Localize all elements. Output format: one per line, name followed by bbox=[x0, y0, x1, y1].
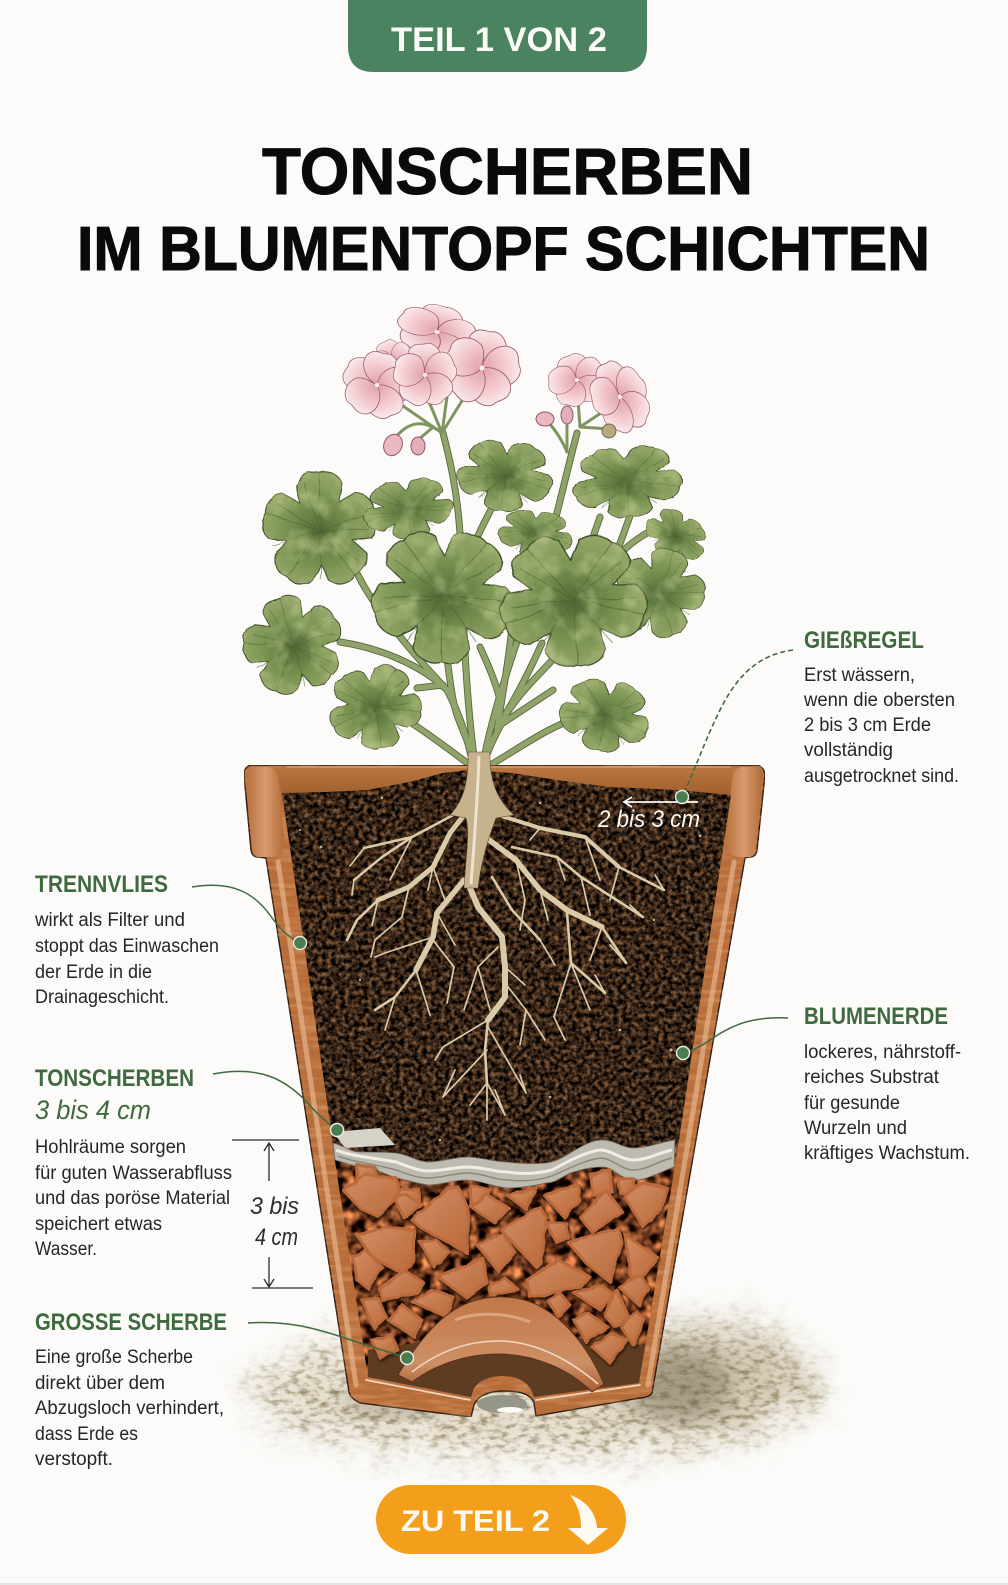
callout: Tonscherben: 3 bis 4 cm bbox=[35, 1095, 151, 1125]
callout: Trennvlies: TRENNVLIES bbox=[35, 871, 168, 898]
clay shards layer bbox=[343, 1165, 667, 1363]
pot wall highlights bbox=[278, 767, 734, 1400]
callout: Grosse Scherbe: Eine große Scherbe bbox=[35, 1347, 193, 1368]
roots bbox=[347, 810, 664, 1120]
button: zu Teil 2 bbox=[376, 1485, 626, 1554]
flower cluster right bbox=[536, 344, 666, 448]
callout: Gießregel: ausgetrocknet sind. bbox=[804, 766, 959, 787]
separation fleece bbox=[333, 1128, 675, 1188]
flower cluster left bbox=[329, 295, 530, 459]
soil specks bbox=[299, 797, 701, 1141]
callout: Grosse Scherbe: Abzugsloch verhindert, bbox=[35, 1398, 224, 1419]
callout: Gießregel: wenn die obersten bbox=[803, 690, 955, 711]
callout: Gießregel: 2 bis 3 cm Erde bbox=[804, 715, 931, 736]
measurement: 2 bis 3 cm: 2 bis 3 cm bbox=[597, 806, 700, 833]
measurement: 3 bis 4 cm bbox=[232, 1140, 313, 1288]
callout: Blumenerde: Wurzeln und bbox=[804, 1118, 907, 1139]
callout: Trennvlies: stoppt das Einwaschen bbox=[35, 936, 219, 957]
callout: Grosse Scherbe bbox=[35, 1309, 414, 1470]
callout: Tonscherben bbox=[35, 1065, 344, 1260]
title: TONSCHERBEN bbox=[262, 134, 753, 208]
callout: Tonscherben: Wasser. bbox=[35, 1239, 97, 1260]
callout: Blumenerde bbox=[676, 1003, 970, 1164]
callout: Trennvlies: Drainageschicht. bbox=[35, 987, 169, 1008]
illustration: pot cross-section bbox=[244, 752, 765, 1417]
callout: Blumenerde: reiches Substrat bbox=[804, 1067, 940, 1088]
callout: Blumenerde: kräftiges Wachstum. bbox=[804, 1143, 970, 1164]
callout: Tonscherben: speichert etwas bbox=[35, 1214, 162, 1235]
callout: Grosse Scherbe: verstopft. bbox=[35, 1449, 113, 1470]
left rim pillar bbox=[246, 767, 285, 857]
callout: Gießregel bbox=[676, 627, 959, 804]
callout: Grosse Scherbe: GROSSE SCHERBE bbox=[35, 1309, 227, 1336]
callout: Gießregel: vollständig bbox=[804, 740, 893, 761]
callout: Grosse Scherbe: dass Erde es bbox=[35, 1424, 138, 1445]
callout: Gießregel: Erst wässern, bbox=[804, 665, 915, 686]
callout: Tonscherben: Hohlräume sorgen bbox=[35, 1137, 186, 1158]
potting soil bbox=[282, 770, 731, 1163]
callout: Grosse Scherbe: direkt über dem bbox=[35, 1373, 165, 1394]
plant crown and taproot bbox=[450, 752, 514, 888]
callout: Gießregel: GIEßREGEL bbox=[804, 627, 924, 654]
right rim pillar bbox=[725, 767, 763, 857]
drainage hole bbox=[477, 1395, 527, 1413]
callout: Trennvlies: wirkt als Filter und bbox=[34, 910, 185, 931]
badge: Teil 1 von 2 bbox=[348, 0, 647, 72]
drainage cavity with small pebbles bbox=[331, 1135, 680, 1397]
callout: Trennvlies bbox=[34, 871, 306, 1008]
measurement: 3 bis 4 cm: 4 cm bbox=[255, 1224, 298, 1251]
callout: Blumenerde: lockeres, nährstoff- bbox=[804, 1042, 961, 1063]
badge: Teil 1 von 2: TEIL 1 VON 2 bbox=[391, 21, 607, 59]
title bbox=[77, 134, 930, 284]
ground shadow under the pot bbox=[250, 1325, 820, 1454]
pot body bbox=[244, 765, 765, 1417]
plant leaves bbox=[229, 437, 716, 759]
pot back wall bbox=[278, 767, 735, 802]
button: zu Teil 2: ZU TEIL 2 bbox=[401, 1505, 550, 1538]
large curved shard over the drainage hole bbox=[398, 1297, 604, 1392]
title: IM BLUMENTOPF SCHICHTEN bbox=[77, 215, 930, 284]
callout: Trennvlies: der Erde in die bbox=[35, 962, 152, 983]
pot floor bbox=[368, 1330, 645, 1397]
callout: Tonscherben: für guten Wasserabfluss bbox=[35, 1163, 232, 1184]
illustration: geranium plant bbox=[229, 295, 716, 770]
callout: Tonscherben: TONSCHERBEN bbox=[35, 1065, 194, 1092]
callout: Tonscherben: und das poröse Material bbox=[35, 1188, 230, 1209]
plant stems bbox=[340, 383, 647, 770]
icon: curved arrow down bbox=[568, 1495, 608, 1545]
callout: Blumenerde: BLUMENERDE bbox=[804, 1003, 948, 1030]
callout: Blumenerde: für gesunde bbox=[804, 1093, 900, 1114]
measurement: 3 bis 4 cm: 3 bis bbox=[250, 1193, 299, 1220]
